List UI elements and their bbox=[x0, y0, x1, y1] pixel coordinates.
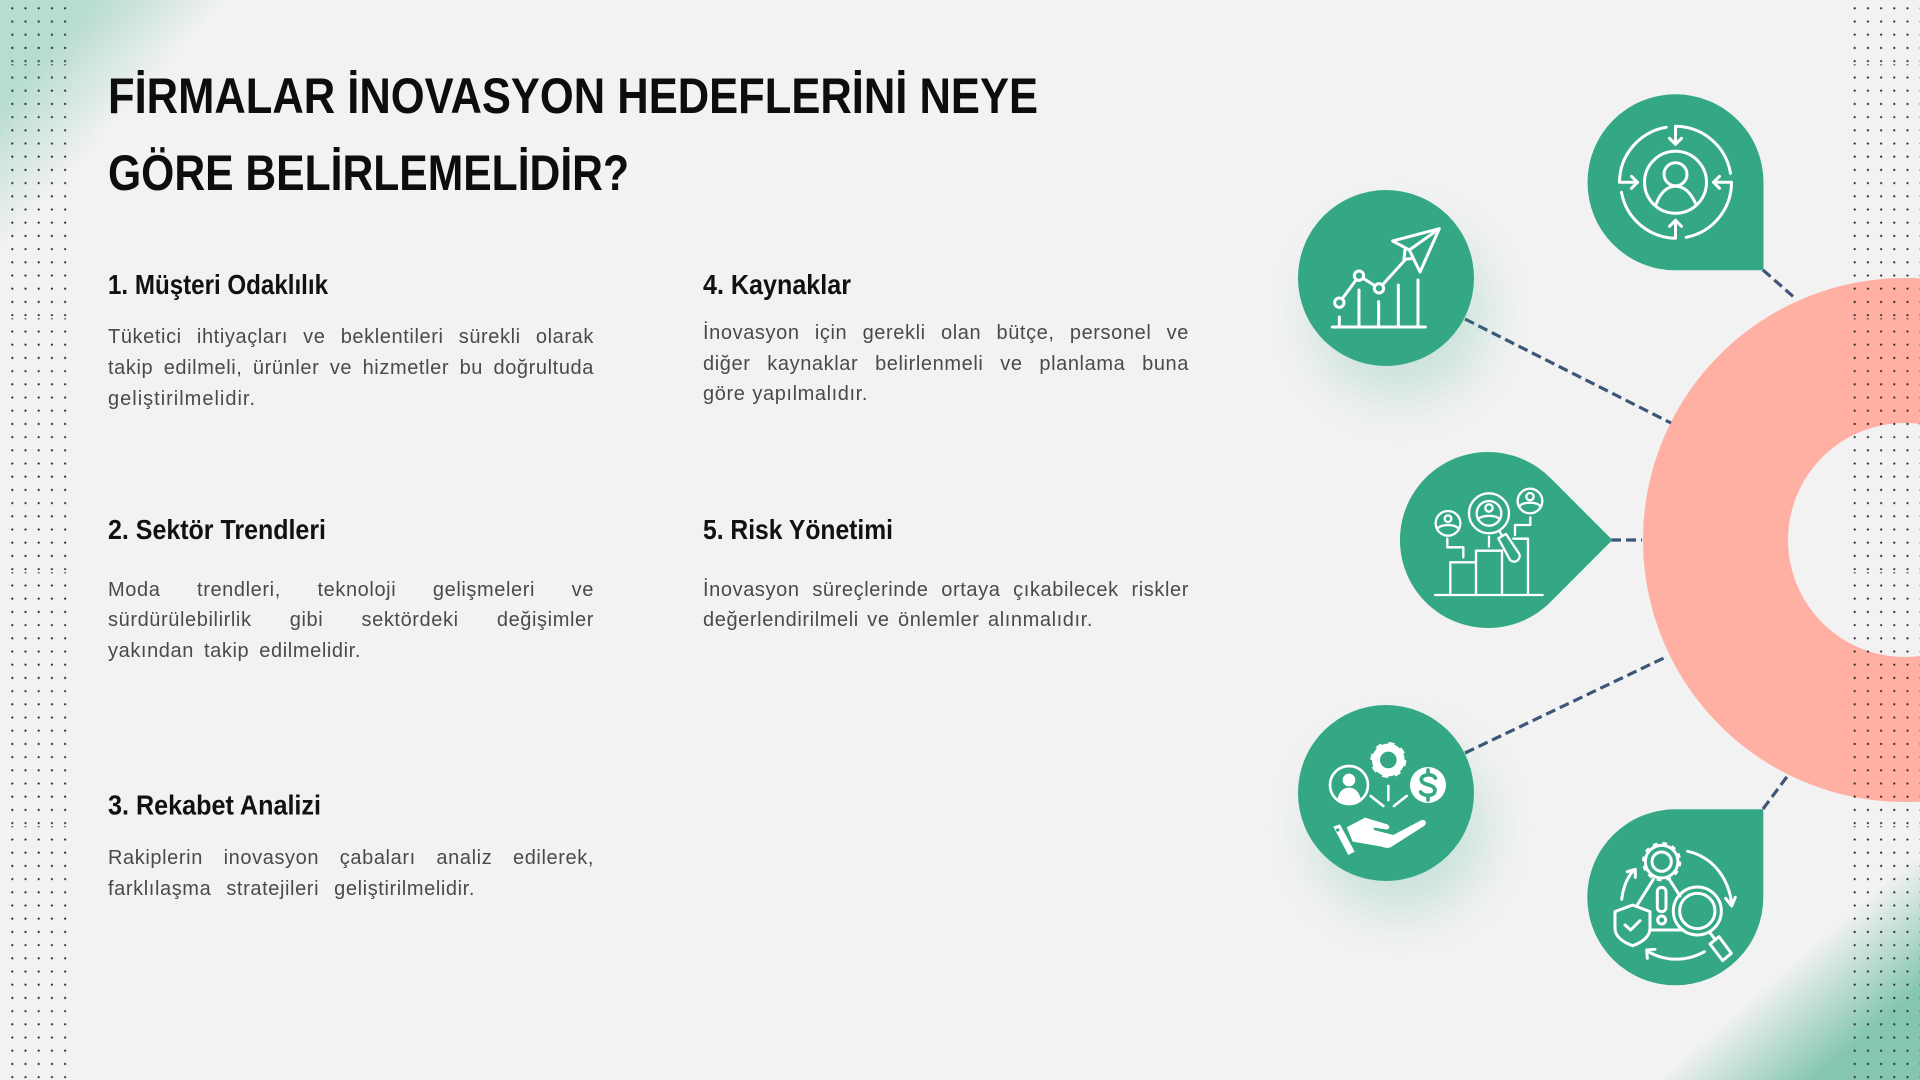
node: top pin with customer icon bbox=[1588, 94, 1764, 270]
heading: 5. Risk Yönetimi: 5. Risk Yönetimi bbox=[703, 514, 893, 545]
text block: 3. Rekabet Analizi: Rakiplerin inovasyon çabaları analiz edilerek, bbox=[108, 847, 594, 869]
text block: 1. Müşteri Odaklılık: geliştirilmelidir. bbox=[108, 388, 256, 410]
donut hub bbox=[1643, 278, 1920, 802]
text block: 5. Risk Yönetimi bbox=[703, 514, 1189, 631]
text block: 2. Sektör Trendleri bbox=[108, 514, 594, 662]
node: bottom pin with risk icon bbox=[1587, 809, 1763, 985]
text block: 3. Rekabet Analizi bbox=[108, 789, 594, 900]
text block: 4. Kaynaklar bbox=[703, 269, 1189, 405]
heading: 3. Rekabet Analizi: 3. Rekabet Analizi bbox=[108, 789, 321, 820]
text block: 2. Sektör Trendleri: Moda trendleri, teknoloji gelişmeleri ve bbox=[108, 579, 594, 601]
title bbox=[108, 68, 1038, 201]
title: GÖRE BELİRLEMELİDİR? bbox=[108, 145, 629, 201]
icon: bar chart with magnifier and people bbox=[1435, 489, 1543, 595]
corner gradient: bottom right bbox=[1650, 860, 1920, 1080]
heading: 4. Kaynaklar: 4. Kaynaklar bbox=[703, 269, 851, 300]
text block: 4. Kaynaklar: göre yapılmalıdır. bbox=[703, 383, 868, 405]
corner gradient: top left bbox=[0, 0, 300, 280]
heading: 2. Sektör Trendleri: 2. Sektör Trendleri bbox=[108, 514, 326, 545]
text block: 1. Müşteri Odaklılık: Tüketici ihtiyaçları ve beklentileri sürekli olarak bbox=[108, 326, 594, 348]
icon: customer focus bbox=[1620, 126, 1732, 238]
icon: growth chart and paper plane bbox=[1332, 229, 1439, 327]
node: circle with growth chart icon bbox=[1298, 190, 1488, 400]
node: middle pin with market research icon bbox=[1400, 452, 1612, 628]
text block: 4. Kaynaklar: diğer kaynaklar belirlenmeli ve planlama buna bbox=[703, 352, 1189, 374]
text block: 5. Risk Yönetimi: İnovasyon süreçlerinde ortaya çıkabilecek riskler bbox=[703, 579, 1189, 601]
text block: 5. Risk Yönetimi: değerlendirilmeli ve önlemler alınmalıdır. bbox=[703, 609, 1093, 631]
text block: 4. Kaynaklar: İnovasyon için gerekli olan bütçe, personel ve bbox=[703, 322, 1189, 344]
text block: 3. Rekabet Analizi: farklılaşma stratejileri geliştirilmelidir. bbox=[108, 878, 475, 900]
text block: 1. Müşteri Odaklılık: takip edilmeli, ürünler ve hizmetler bu doğrultuda bbox=[108, 357, 594, 379]
icon: hand with person, gear and money bbox=[1330, 745, 1446, 855]
text block: 2. Sektör Trendleri: sürdürülebilirlik gibi sektördeki değişimler bbox=[108, 609, 594, 631]
node: circle with resources icon bbox=[1298, 705, 1488, 915]
text block: 1. Müşteri Odaklılık bbox=[108, 269, 594, 410]
dot grid: right bbox=[1848, 0, 1920, 1080]
heading: 1. Müşteri Odaklılık: 1. Müşteri Odaklılık bbox=[108, 269, 328, 300]
dashed connector lines bbox=[1465, 270, 1796, 809]
dot grid: left bbox=[6, 0, 72, 1080]
text block: 2. Sektör Trendleri: yakından takip edilmelidir. bbox=[108, 640, 361, 662]
icon: risk management bbox=[1615, 843, 1735, 961]
